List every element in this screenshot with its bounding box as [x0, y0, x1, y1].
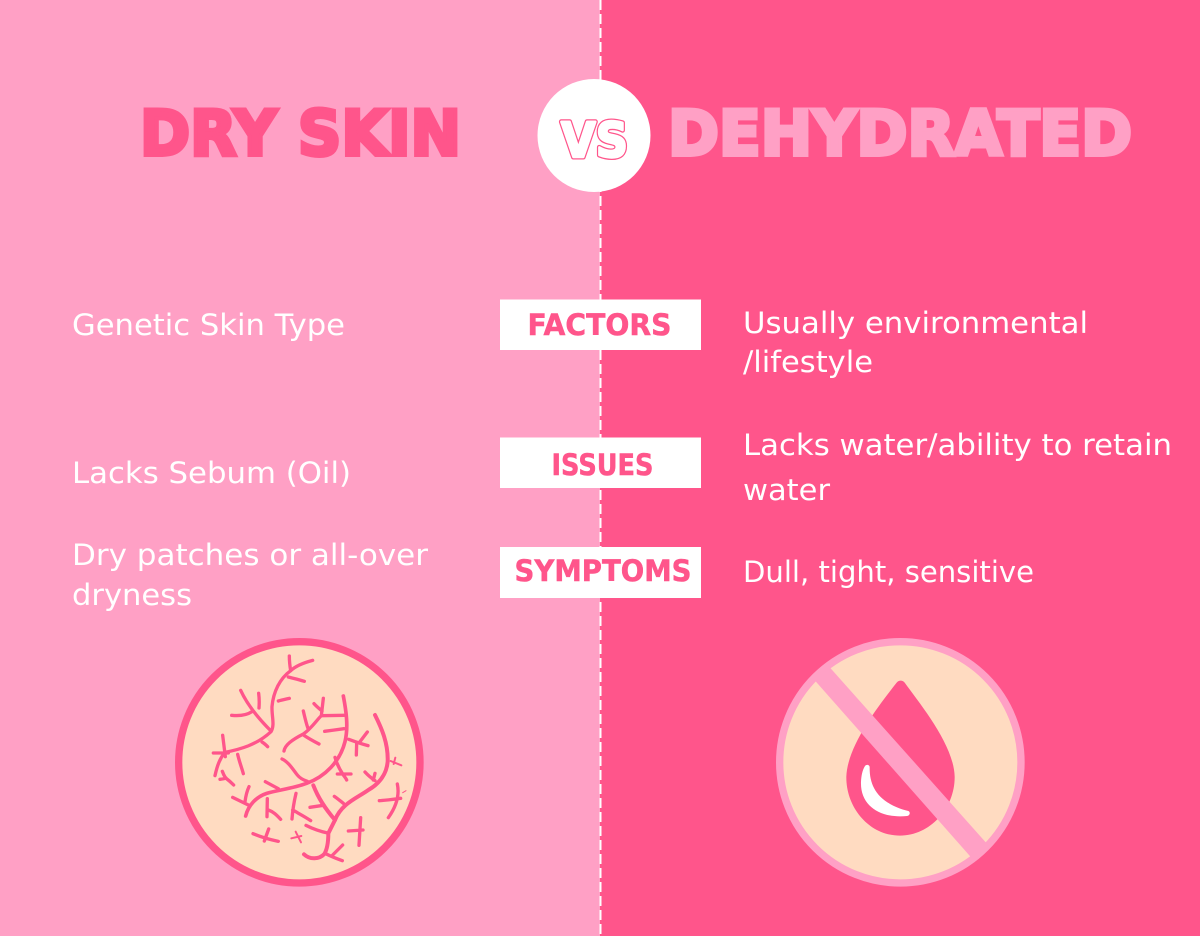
right text: symptoms: Dull, tight, sensitive — [743, 555, 1034, 589]
vs badge — [538, 79, 650, 192]
right text: factors: /lifestyle — [743, 345, 873, 379]
left text: symptoms: dryness — [72, 578, 192, 612]
panel: dehydrated background — [600, 0, 1200, 936]
label: issues: ISSUES — [552, 448, 654, 482]
right text: factors — [743, 306, 1088, 379]
label: factors: FACTORS — [528, 308, 672, 342]
water drop — [846, 681, 955, 836]
label: symptoms — [500, 547, 701, 598]
vs badge: VS — [561, 113, 628, 169]
left text: symptoms: Dry patches or all-over — [72, 538, 428, 572]
icon: no water drop — [780, 642, 1021, 883]
right text: issues: water — [743, 473, 830, 507]
vs badge: VS — [561, 113, 628, 169]
title: dehydrated: DEHYDRATED — [668, 97, 1132, 170]
left text: symptoms — [72, 538, 428, 612]
drop highlight — [861, 765, 910, 816]
icon: cracked dry skin — [179, 642, 420, 883]
left text: factors: Genetic Skin Type — [72, 308, 345, 342]
panel: dry skin background — [0, 0, 600, 936]
label: factors — [500, 300, 701, 350]
title: dry skin: DRY SKIN — [140, 97, 461, 170]
prohibition bar — [815, 668, 987, 858]
label: symptoms: SYMPTOMS — [514, 554, 692, 588]
right text: factors: Usually environmental — [743, 306, 1088, 340]
label: issues — [500, 438, 701, 488]
right text: issues: Lacks water/ability to retain — [743, 428, 1172, 462]
left text: issues: Lacks Sebum (Oil) — [72, 456, 351, 490]
right text: issues — [743, 428, 1172, 507]
